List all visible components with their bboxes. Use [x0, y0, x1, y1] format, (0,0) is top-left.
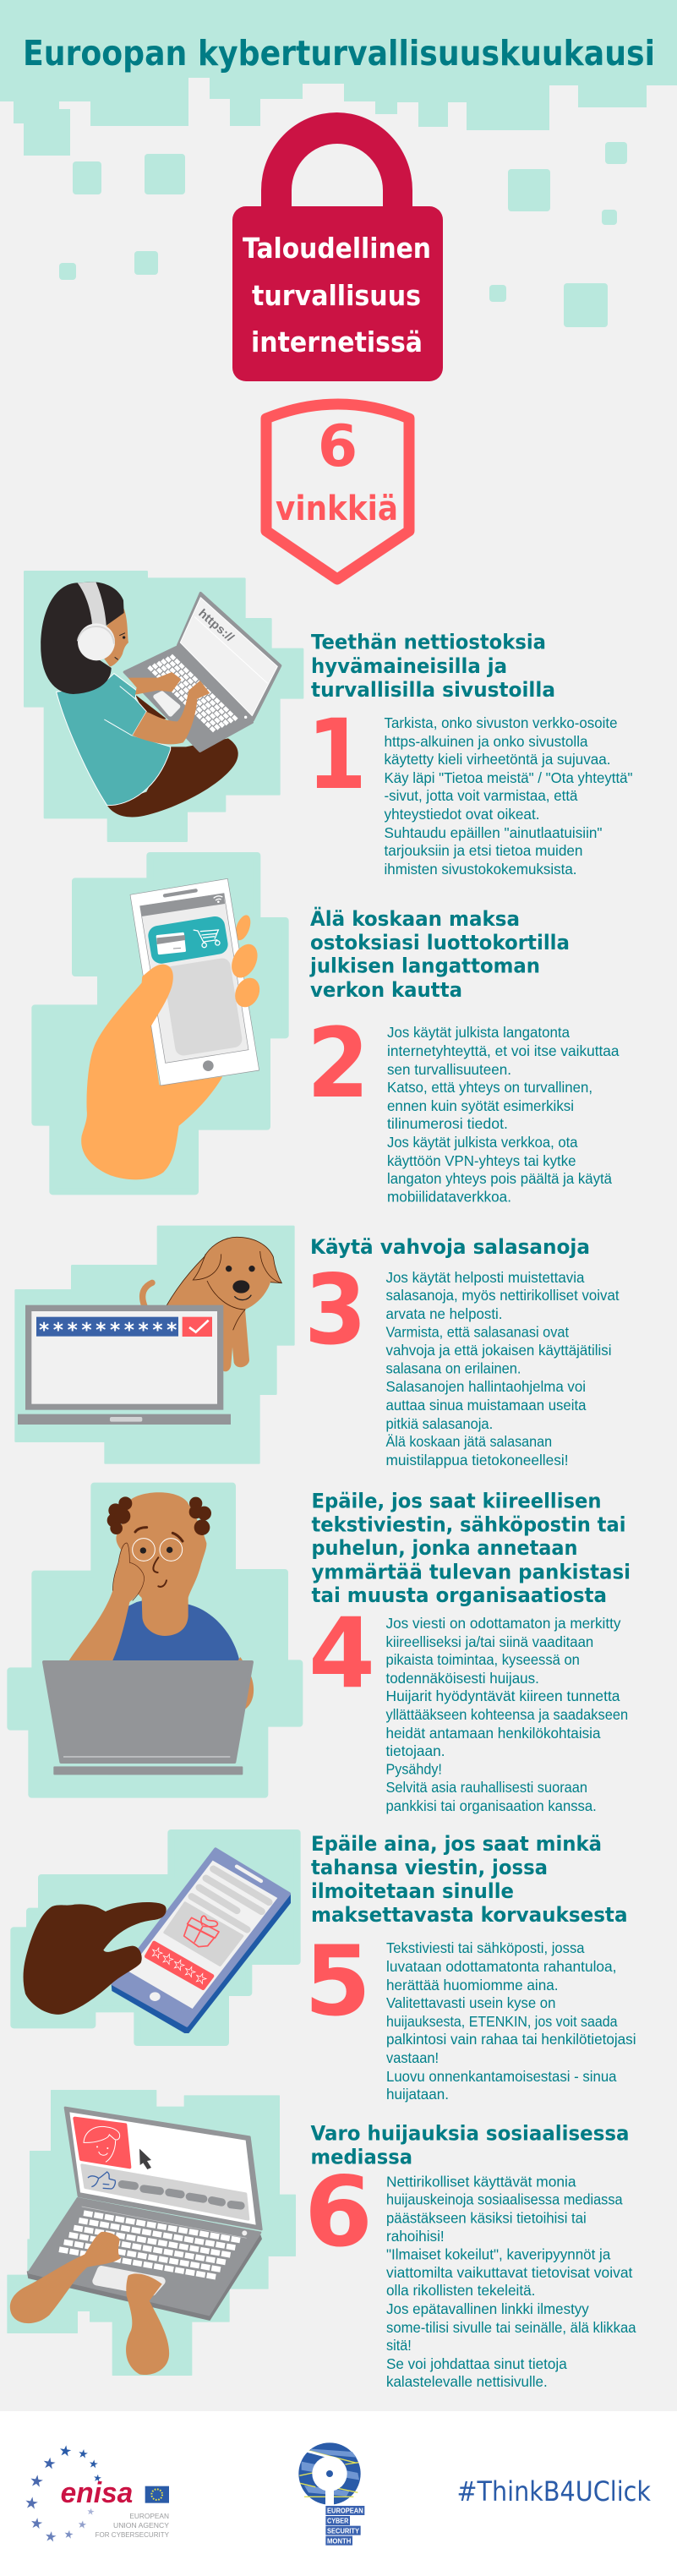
number 2: 2 — [307, 1007, 369, 1119]
heading 2: verkon kautta — [310, 978, 462, 1002]
body text 5: Luovu onnenkantamoisestasi - sinua — [386, 2068, 617, 2085]
shield: 6 vinkkiä: vinkkiä — [276, 489, 398, 528]
heading 4: ymmärtää tulevan pankistasi — [311, 1561, 631, 1584]
body text 6: olla rikollisten tekeleitä. — [386, 2282, 535, 2299]
body text 2: sen turvallisuuteen. — [387, 1061, 511, 1078]
globe keyhole — [298, 2442, 361, 2506]
number 1: 1 — [307, 698, 367, 811]
heading 2: ostoksiasi luottokortilla — [310, 931, 570, 954]
heading 1 — [311, 631, 555, 702]
body text 5: palkintosi vain rahaa tai henkilötietojasi — [386, 2031, 636, 2048]
heading 5: maksettavasta korvauksesta — [311, 1903, 627, 1927]
mint panel 2 — [35, 856, 286, 1191]
mint panel 4 — [10, 1486, 299, 1795]
illustration 6: hands typing on laptop — [8, 2091, 295, 2375]
red star band — [146, 1943, 212, 1988]
laptop: https:// — [196, 606, 237, 644]
keyboard — [59, 2213, 240, 2277]
illustration 2: hand holding phone — [35, 856, 286, 1191]
shopping cart — [194, 930, 220, 948]
shirt — [72, 1600, 239, 1660]
heading 3: Käytä vahvoja salasanoja — [310, 1235, 590, 1259]
shield: 6 vinkkiä: 6 — [318, 413, 358, 480]
agency name: EUROPEAN — [129, 2512, 169, 2520]
star ring — [25, 2444, 101, 2542]
heading 4: tai muusta organisaatiosta — [311, 1583, 607, 1607]
headphones — [78, 582, 115, 660]
hair — [107, 1496, 211, 1535]
body text 5 — [386, 1939, 636, 2103]
body text 1: tarjouksiin ja etsi tietoa muiden — [384, 842, 583, 859]
ENISA logo — [25, 2444, 169, 2542]
body text 4: Jos viesti on odottamaton ja merkitty — [385, 1615, 621, 1632]
body text 6: kalastelevalle nettisivulle. — [386, 2373, 548, 2390]
body text 6: sitä! — [386, 2337, 412, 2354]
body text 4: heidät antamaan henkilökohtaisia — [385, 1725, 601, 1742]
body text 2: Katso, että yhteys on turvallinen, — [387, 1079, 592, 1096]
laptop — [124, 593, 281, 751]
body text 2: Jos käytät julkista verkkoa, ota — [387, 1134, 578, 1151]
dog — [143, 1237, 281, 1371]
number 5: 5 — [304, 1925, 371, 2037]
number 4: 4 — [308, 1597, 375, 1709]
mint panel 1 — [25, 572, 303, 841]
body text 4 — [385, 1615, 628, 1814]
body text 1: -sivut, jotta voit varmistaa, että — [384, 787, 578, 804]
body text 2: ennen kuin syötät esimerkiksi — [387, 1097, 574, 1114]
subtitle text: turvallisuus — [252, 279, 421, 312]
body text 5: herättää huomiomme aina. — [386, 1977, 558, 1994]
arm — [69, 1543, 145, 1660]
face — [99, 609, 128, 666]
laptop with password — [18, 1305, 231, 1425]
hashtag: #ThinkB4UClick — [456, 2475, 651, 2508]
body text 2: Jos käytät julkista langatonta — [387, 1024, 570, 1041]
body text 1 — [384, 714, 632, 878]
body text 2: langaton yhteys pois päältä ja käytä — [387, 1170, 612, 1187]
phone — [112, 1848, 291, 2033]
body text 6: Se voi johdattaa sinut tietoja — [386, 2355, 567, 2372]
body text 6 — [386, 2173, 636, 2390]
body text 3: auttaa sinua muistamaan useita — [385, 1397, 587, 1414]
body text 1: Käy läpi "Tietoa meistä" / "Ota yhteyttä" — [384, 769, 632, 786]
body text 3: salasana on erilainen. — [385, 1359, 521, 1376]
body text 3: muistilappua tietokoneellesi! — [385, 1452, 568, 1468]
arms — [10, 2232, 169, 2375]
hair — [41, 582, 124, 694]
heading 2: Älä koskaan maksa — [310, 906, 520, 931]
subtitle text: Taloudellinen — [243, 232, 431, 265]
heading 6 — [311, 2122, 629, 2169]
logo labels: SECURITY — [327, 2526, 359, 2535]
cursor — [139, 2149, 151, 2169]
illustration 1: woman with laptop — [25, 572, 303, 841]
laptop lid — [44, 1662, 252, 1762]
body text 6: Nettirikolliset käyttävät monia — [386, 2173, 576, 2190]
number 3: 3 — [304, 1254, 367, 1366]
enisa wordmark: enisa — [61, 2477, 133, 2509]
body text 2: tilinumerosi tiedot. — [387, 1115, 508, 1132]
body text 3: arvata ne helposti. — [385, 1305, 502, 1322]
body text 6: some-tilisi sivulle tai seinälle, älä klikkaa — [386, 2319, 636, 2336]
body text 5: luvataan odottamatonta rahantuloa, — [386, 1958, 617, 1975]
body text 3: vahvoja ja että jokaisen käyttäjätilisi — [385, 1342, 612, 1359]
heading 5: ilmoitetaan sinulle — [311, 1879, 514, 1903]
thumb and fingers — [138, 940, 265, 1025]
agency name — [96, 2512, 169, 2539]
heading 1: turvallisilla sivustoilla — [311, 678, 555, 702]
heading 2 — [309, 906, 570, 1002]
phone — [130, 878, 259, 1086]
body text 3: Varmista, että salasanasi ovat — [385, 1324, 569, 1341]
agency name: UNION AGENCY — [113, 2521, 169, 2530]
heading 5: tahansa viestin, jossa — [311, 1856, 548, 1879]
EU flag — [145, 2486, 169, 2503]
padlock with subtitle — [232, 112, 443, 381]
body text 4: pikaista toimintaa, kyseessä on — [385, 1651, 580, 1668]
logo labels: EUROPEAN — [327, 2507, 363, 2515]
body text 2: mobiilidataverkkoa. — [387, 1189, 511, 1206]
body text 5: vastaan! — [386, 2049, 439, 2066]
face details — [133, 1528, 183, 1587]
body text 3: Salasanojen hallintaohjelma voi — [385, 1378, 586, 1395]
body text 2: internetyhteyttä, et voi itse vaikuttaa — [387, 1042, 620, 1059]
body text 1: käytetty kieli virheetöntä ja sujuvaa. — [384, 751, 610, 768]
top finger — [232, 913, 254, 943]
illustration 5: hand tapping phone — [14, 1833, 298, 2043]
body text 3: pitkiä salasanoja. — [385, 1415, 493, 1432]
body text 6: rahoihisi! — [386, 2228, 445, 2245]
heading 4: tekstiviestin, sähköpostin tai — [311, 1513, 625, 1537]
body text 6: viattomilta vaikuttavat tietovisat voivat — [386, 2264, 633, 2281]
arms — [128, 672, 210, 744]
mint panel 6 — [8, 2091, 295, 2375]
body text 4: Huijarit hyödyntävät kiireen tunnetta — [385, 1687, 620, 1704]
illustration 4: man at laptop — [10, 1486, 299, 1795]
shirt — [57, 674, 171, 806]
body text 1: https-alkuinen ja onko sivustolla — [384, 733, 588, 750]
body text 3 — [385, 1269, 620, 1468]
heading 6: mediassa — [311, 2146, 412, 2169]
body text 4: todennäköisesti huijaus. — [385, 1670, 539, 1687]
body text 4: pankkisi tai organisaation kanssa. — [385, 1797, 597, 1814]
padlock body — [232, 206, 443, 381]
heading 1: hyvämaineisilla ja — [311, 654, 507, 678]
like strip — [82, 2165, 248, 2219]
teal card — [147, 915, 229, 965]
body text 3: Älä koskaan jätä salasanan — [385, 1433, 552, 1450]
European Cyber Security Month logo — [298, 2442, 364, 2546]
body text 2: käyttöön VPN-yhteys tai kytke — [387, 1152, 576, 1169]
body text 3: salasanoja, myös nettirikolliset voivat — [385, 1287, 620, 1304]
head — [116, 1492, 206, 1636]
body text 5: Valitettavasti usein kyse on — [386, 1994, 555, 2011]
header mint band — [0, 0, 677, 327]
heading 5: Epäile aina, jos saat minkä — [311, 1832, 602, 1856]
heading 4: puhelun, jonka annetaan — [311, 1536, 578, 1560]
legs — [107, 695, 238, 817]
heading 6: Varo huijauksia sosiaalisessa — [311, 2122, 629, 2146]
logo labels: CYBER — [327, 2517, 348, 2525]
body text 6: "Ilmaiset kokeilut", kaveripyynnöt ja — [386, 2245, 611, 2262]
laptop — [27, 2108, 262, 2321]
body text 1: ihmisten sivustokokemuksista. — [384, 861, 576, 878]
subtitle text: internetissä — [251, 325, 423, 358]
body text 2 — [387, 1024, 620, 1206]
mint panel 3 — [16, 1227, 293, 1463]
body text 1: yhteystiedot ovat oikeat. — [384, 806, 539, 823]
body text 4: yllättääkseen kohteensa ja saadakseen — [385, 1706, 628, 1723]
body text 6: huijauskeinoja sosiaalisessa mediassa — [386, 2191, 623, 2208]
body text 3: Jos käytät helposti muistettavia — [385, 1269, 585, 1286]
red avatar — [74, 2119, 129, 2167]
trackpad — [96, 2270, 161, 2292]
laptop with password: ********** — [39, 1318, 177, 1342]
body text 1: Tarkista, onko sivuston verkko-osoite — [384, 714, 617, 731]
logo labels: MONTH — [327, 2536, 351, 2545]
heading 2: julkisen langattoman — [309, 954, 540, 977]
heading 4: Epäile, jos saat kiireellisen — [311, 1490, 602, 1513]
padlock shackle — [261, 112, 412, 211]
shield: 6 vinkkiä — [266, 404, 409, 579]
logo labels — [325, 2506, 364, 2546]
body text 6: Jos epätavallinen linkki ilmestyy — [386, 2300, 589, 2317]
hand — [81, 965, 222, 1179]
heading 1: Teethän nettiostoksia — [311, 631, 546, 654]
body text 1: Suhtaudu epäillen "ainutlaatuisiin" — [384, 824, 602, 841]
body text 4: Selvitä asia rauhallisesti suoraan — [385, 1779, 587, 1796]
dark hand — [24, 1902, 167, 2015]
gift icon — [184, 1916, 219, 1947]
body text 4: Pysähdy! — [385, 1760, 442, 1777]
heading 5 — [311, 1832, 627, 1927]
mint panel 5 — [14, 1833, 298, 2043]
body text 4: tietojaan. — [385, 1742, 445, 1759]
body text 5: huijataan. — [386, 2086, 449, 2103]
subtitle text — [243, 232, 431, 358]
body text 6: päästäkseen käsiksi tietoihisi tai — [386, 2210, 587, 2227]
agency name: FOR CYBERSECURITY — [96, 2530, 169, 2539]
illustration 3: dog behind laptop — [16, 1227, 293, 1463]
body text 5: huijauksesta, ETENKIN, jos voit saada — [386, 2013, 618, 2030]
body text 4: kiireelliseksi ja/tai siinä vaaditaan — [385, 1633, 593, 1650]
number 6: 6 — [304, 2156, 373, 2268]
footer panel — [0, 2411, 677, 2576]
body text 5: Tekstiviesti tai sähköposti, jossa — [386, 1939, 585, 1956]
heading 4 — [311, 1490, 631, 1607]
